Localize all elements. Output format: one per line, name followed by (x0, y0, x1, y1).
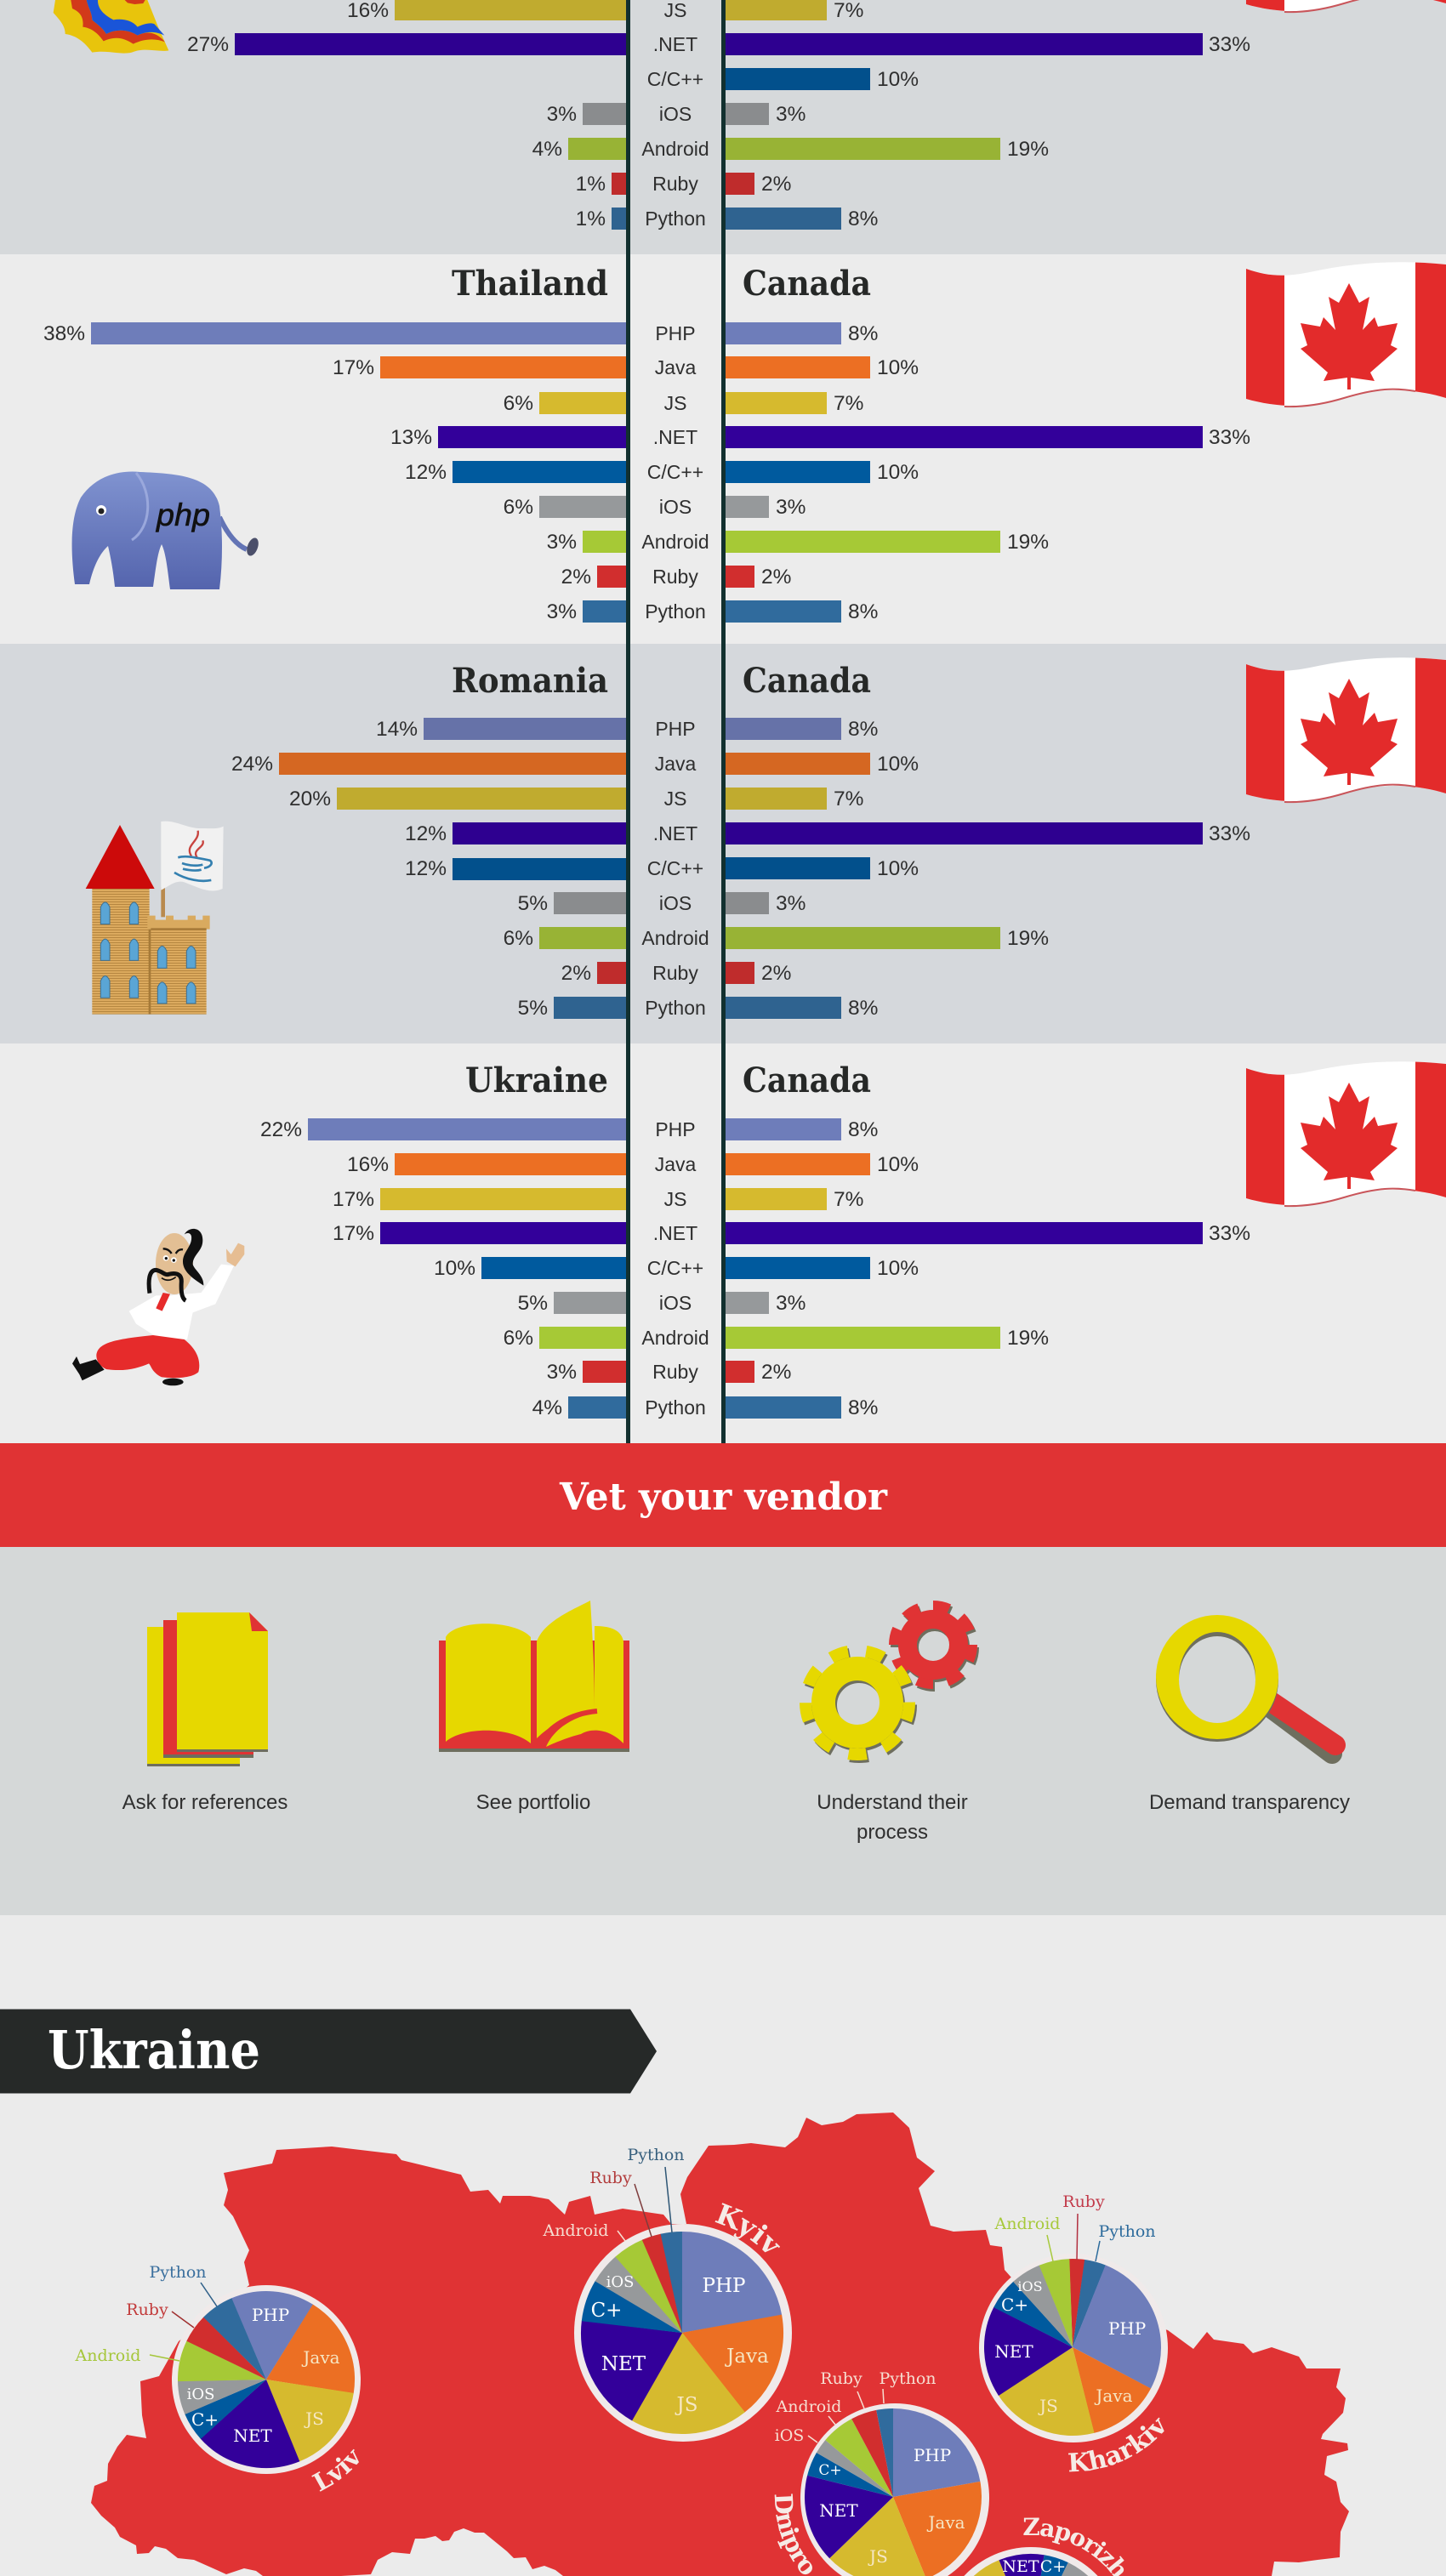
heading: Romania: Romania (452, 661, 608, 701)
row: JS (289, 788, 863, 810)
panel: vendor checks (0, 1547, 1446, 1915)
panel: Ukraine vs Canada (0, 1043, 1446, 1443)
row: .NET: 27% (187, 33, 229, 56)
row: JS: JS (664, 788, 686, 810)
pie: Zaporizhzhia (964, 2517, 1124, 2576)
icon: Cossack dancer (72, 1229, 244, 1385)
row: C/C++: C/C++ (647, 461, 703, 483)
row: iOS: iOS (659, 1292, 692, 1314)
pie: Zaporizhzhia: C+ (1040, 2557, 1066, 2576)
row: Java: 17% (333, 356, 374, 379)
banner: Vet your vendor (0, 1443, 1446, 1547)
row: iOS (504, 496, 806, 519)
pie: Kyiv: Python (627, 2146, 685, 2164)
row: C/C++: 10% (877, 461, 919, 484)
pie: Kharkiv: JS (1038, 2396, 1058, 2416)
label: Understand their process: process (857, 1821, 928, 1844)
row: .NET: .NET (653, 426, 697, 448)
row: Python (532, 1396, 878, 1419)
pie: Dnipro: Android (776, 2397, 841, 2416)
row: Java (333, 356, 919, 379)
row: iOS: 3% (776, 892, 806, 915)
row: iOS: 3% (776, 103, 806, 126)
flag: Canada (1246, 651, 1446, 812)
row: JS: 7% (834, 392, 863, 415)
row: Ruby: 2% (761, 1361, 791, 1384)
row: Ruby (576, 173, 791, 196)
row: Java: Java (655, 753, 696, 775)
row: Python: 5% (518, 997, 548, 1020)
row: Python: Python (645, 1396, 706, 1419)
pie: Kyiv: JS (675, 2394, 697, 2416)
pie: Lviv: Android (75, 2346, 140, 2365)
pie: Lviv: Lviv (311, 2449, 359, 2492)
row: C/C++: 10% (877, 1257, 919, 1280)
pie: Kharkiv: Python (1098, 2222, 1156, 2241)
flag: Canada (1246, 255, 1446, 417)
pie: Dnipro: Ruby (820, 2369, 862, 2388)
row: .NET: 17% (333, 1222, 374, 1245)
row: iOS (518, 892, 806, 915)
panel: Romania vs Canada (0, 644, 1446, 1043)
row: Android: 19% (1007, 1327, 1049, 1350)
row: iOS: 5% (518, 1292, 548, 1315)
pie: Lviv: Java (301, 2347, 340, 2368)
row: Python (518, 997, 878, 1020)
row: JS: 7% (834, 1188, 863, 1211)
pie: Kharkiv: Android (994, 2215, 1060, 2233)
row: Android: 19% (1007, 138, 1049, 161)
row: C/C++: 10% (877, 857, 919, 880)
row: Python: 3% (547, 600, 577, 623)
pie: Dnipro: PHP (914, 2445, 951, 2465)
pie: Lviv: Python (149, 2263, 207, 2282)
pie: Zaporizhzhia: Zaporizhzhia (1023, 2517, 1124, 2576)
pie: Kyiv: iOS (606, 2273, 634, 2291)
pie: Kharkiv: Java (1094, 2386, 1133, 2406)
icon: PHP elephant (72, 472, 260, 589)
pie: Lviv: iOS (187, 2386, 214, 2403)
row: Python: 8% (848, 997, 878, 1020)
row: C/C++ (434, 1257, 919, 1280)
row: Android: Android (641, 927, 709, 949)
row: PHP (376, 718, 878, 741)
row: PHP: 22% (260, 1118, 302, 1141)
row: Ruby: 2% (561, 566, 591, 589)
row: Java: Java (655, 356, 696, 378)
pie: Kyiv: C+ (591, 2300, 622, 2322)
panel: Thailand vs Canada (0, 254, 1446, 644)
row: Python: Python (645, 600, 706, 623)
heading: Thailand: Thailand (452, 264, 608, 304)
row: JS: JS (664, 1188, 686, 1210)
flag: Canada (1246, 0, 1446, 22)
row: .NET: 33% (1209, 1222, 1250, 1245)
row: Android: 19% (1007, 531, 1049, 554)
row: JS: 6% (504, 392, 533, 415)
row: Java: 10% (877, 753, 919, 776)
row: .NET: .NET (653, 822, 697, 844)
panel: first country comparison (0, 0, 1446, 254)
pie: Kharkiv (979, 2192, 1168, 2471)
row: Android (504, 927, 1049, 950)
row: Android (547, 531, 1049, 554)
row: .NET (405, 822, 1250, 845)
banner: Vet your vendor: Vet your vendor (559, 1476, 888, 1519)
row: PHP: PHP (655, 1118, 696, 1140)
row: Python: 8% (848, 1396, 878, 1419)
row: iOS: iOS (659, 103, 692, 125)
row: Android (532, 138, 1049, 161)
flag: Canada (1246, 1055, 1446, 1216)
pie: Lviv: Ruby (126, 2300, 168, 2319)
row: PHP: PHP (655, 322, 696, 344)
row: Java: 10% (877, 1153, 919, 1176)
icon: Java castle (86, 822, 224, 1015)
pie: Dnipro (774, 2369, 989, 2576)
row: JS (333, 1188, 863, 1211)
row: PHP: 8% (848, 322, 878, 345)
row: Java (231, 753, 919, 776)
row: Python: Python (645, 997, 706, 1019)
row: Python (576, 208, 878, 230)
row: .NET (390, 426, 1250, 449)
row: Ruby: Ruby (652, 173, 698, 195)
row: Python: 1% (576, 208, 606, 230)
row: C/C++: 12% (405, 857, 447, 880)
row: Python: 4% (532, 1396, 562, 1419)
row: .NET: 33% (1209, 33, 1250, 56)
row: PHP: PHP (655, 718, 696, 740)
pie: Dnipro: C+ (818, 2462, 842, 2479)
pie: Dnipro: iOS (775, 2426, 804, 2445)
row: Python: 8% (848, 208, 878, 230)
row: iOS (518, 1292, 806, 1315)
pie: Kyiv: Android (543, 2221, 608, 2240)
row: Android (504, 1327, 1049, 1350)
icon: gears (806, 1606, 974, 1757)
row: PHP: 8% (848, 718, 878, 741)
row: Android: 3% (547, 531, 577, 554)
heading: Canada: Canada (743, 264, 871, 304)
row: JS: JS (664, 392, 686, 414)
pie: Zaporizhzhia: NET (1002, 2557, 1039, 2576)
heading: Canada: Canada (743, 661, 871, 701)
row: PHP: 8% (848, 1118, 878, 1141)
row: C/C++ (647, 68, 919, 91)
row: .NET (333, 1222, 1250, 1245)
row: C/C++ (405, 857, 919, 880)
banner: Ukraine heading (0, 2009, 657, 2094)
center column rules (626, 0, 726, 1443)
row: Java: 16% (347, 1153, 389, 1176)
row: Ruby (561, 962, 791, 985)
map: Ukraine (91, 2113, 1349, 2576)
row: C/C++: C/C++ (647, 68, 703, 90)
row: Ruby: 2% (561, 962, 591, 985)
banner: Ukraine heading: Ukraine (48, 2019, 260, 2081)
row: JS (347, 0, 863, 22)
heading: Ukraine: Ukraine (465, 1061, 608, 1100)
pie: Lviv: C+ (191, 2409, 219, 2430)
icon: magnifying glass (1156, 1615, 1335, 1754)
pie: Kyiv (543, 2146, 792, 2442)
row: Ruby: Ruby (652, 962, 698, 984)
pie: Kyiv: NET (601, 2353, 646, 2375)
pie: Lviv (75, 2263, 361, 2492)
row: JS: 7% (834, 788, 863, 810)
row: iOS: 6% (504, 496, 533, 519)
row: Java: 24% (231, 753, 273, 776)
row: PHP: 14% (376, 718, 418, 741)
pie: Kharkiv: Kharkiv (1068, 2417, 1164, 2471)
label: Demand transparency: Demand transparency (1149, 1791, 1350, 1814)
heading: Canada: Canada (743, 1061, 871, 1100)
row: Ruby: 2% (761, 173, 791, 196)
row: .NET: 13% (390, 426, 432, 449)
row: Android: 6% (504, 1327, 533, 1350)
pie: Kharkiv: C+ (1001, 2295, 1028, 2315)
row: Ruby: 1% (576, 173, 606, 196)
pie: Kyiv: Ruby (589, 2169, 632, 2187)
row: Ruby: 2% (761, 962, 791, 985)
row: Ruby: 2% (761, 566, 791, 589)
row: JS: 20% (289, 788, 331, 810)
row: C/C++: 12% (405, 461, 447, 484)
row: Python: 8% (848, 600, 878, 623)
row: iOS: 3% (547, 103, 577, 126)
row: Ruby (561, 566, 791, 589)
pie: Kharkiv: iOS (1017, 2278, 1043, 2295)
icon: open book (439, 1601, 629, 1752)
row: .NET: .NET (653, 1222, 697, 1244)
row: C/C++: C/C++ (647, 857, 703, 879)
row: Android: Android (641, 138, 709, 160)
row: Android: 6% (504, 927, 533, 950)
row: Java (347, 1153, 919, 1176)
pie: Kyiv: Java (725, 2346, 769, 2368)
row: iOS: 3% (776, 1292, 806, 1315)
pie: Dnipro: Python (879, 2369, 936, 2388)
icon: documents (147, 1612, 268, 1766)
row: Ruby (547, 1361, 791, 1384)
row: Android: Android (641, 1327, 709, 1349)
label: Ask for references: Ask for references (122, 1791, 287, 1814)
row: iOS: 5% (518, 892, 548, 915)
pie: Dnipro: NET (819, 2500, 858, 2521)
row: Python (547, 600, 878, 623)
row: Python: Python (645, 208, 706, 230)
row: Android: 19% (1007, 927, 1049, 950)
row: Android: 4% (532, 138, 562, 161)
row: iOS: iOS (659, 892, 692, 914)
row: JS (504, 392, 863, 415)
row: C/C++ (405, 461, 919, 484)
pie: Lviv: NET (233, 2425, 272, 2446)
row: Ruby: Ruby (652, 566, 698, 588)
pie: Dnipro: JS (868, 2546, 888, 2567)
row: Ruby: Ruby (652, 1361, 698, 1383)
pie: Kyiv: PHP (702, 2275, 746, 2297)
pie: Kyiv: Kyiv (714, 2203, 781, 2252)
row: iOS (547, 103, 806, 126)
row: Java: Java (655, 1153, 696, 1175)
label: See portfolio: See portfolio (476, 1791, 590, 1814)
row: PHP: 38% (43, 322, 85, 345)
pie: Kharkiv: Ruby (1062, 2192, 1105, 2211)
row: C/C++: 10% (434, 1257, 475, 1280)
row: iOS: 3% (776, 496, 806, 519)
pie: Dnipro: Java (926, 2512, 965, 2533)
row: iOS: iOS (659, 496, 692, 518)
row: .NET: 33% (1209, 426, 1250, 449)
pie: Kharkiv: NET (994, 2341, 1033, 2362)
row: C/C++: C/C++ (647, 1257, 703, 1279)
icon: PHP elephant: php (156, 498, 210, 532)
label: Understand their process: Understand their (817, 1791, 968, 1814)
row: Android: Android (641, 531, 709, 553)
row: PHP (260, 1118, 878, 1141)
row: .NET: .NET (653, 33, 697, 55)
icon: folk costume (54, 0, 168, 54)
row: Ruby: 3% (547, 1361, 577, 1384)
pie: Lviv: JS (304, 2408, 324, 2429)
row: Java: 10% (877, 356, 919, 379)
row: .NET (187, 33, 1250, 56)
pie: Kharkiv: PHP (1108, 2318, 1146, 2339)
row: PHP (43, 322, 878, 345)
pie: Lviv: PHP (252, 2305, 289, 2325)
row: C/C++: 10% (877, 68, 919, 91)
row: .NET: 12% (405, 822, 447, 845)
row: .NET: 33% (1209, 822, 1250, 845)
row: JS: 17% (333, 1188, 374, 1211)
